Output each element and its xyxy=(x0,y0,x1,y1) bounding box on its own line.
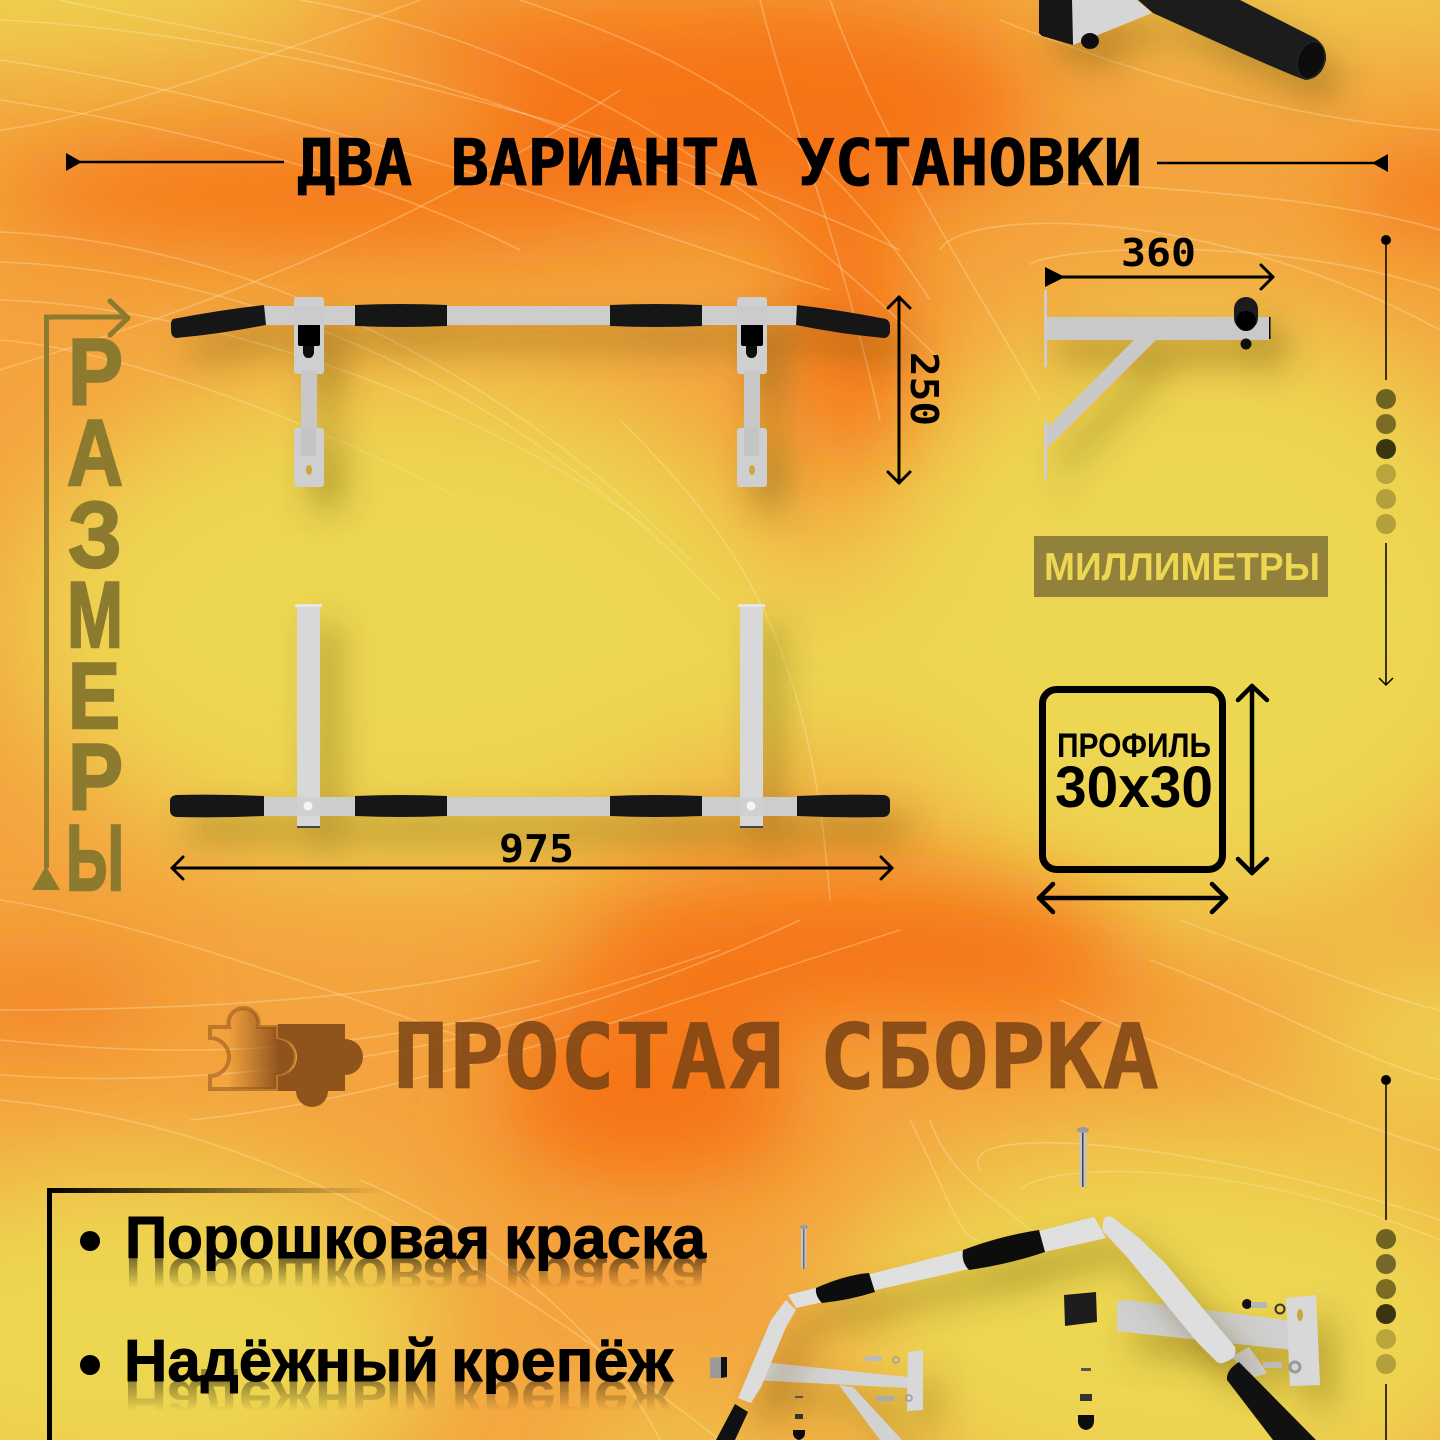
main bar xyxy=(262,306,799,325)
width dimension 250 xyxy=(888,297,946,483)
short anchor bolt xyxy=(800,1225,808,1269)
arrow frame xyxy=(32,301,128,890)
left grip xyxy=(171,305,266,338)
features panel xyxy=(47,1188,707,1440)
title rule left xyxy=(66,153,284,171)
feature: powder paint: Порошковая xyxy=(125,1205,490,1271)
left bracket xyxy=(294,297,324,487)
left black end grip xyxy=(716,1404,748,1440)
vertical word: З xyxy=(68,482,122,587)
right arm xyxy=(1102,1216,1236,1363)
left small plug xyxy=(710,1357,727,1378)
second view of bar, ceiling mounting xyxy=(170,604,890,828)
heading: simple assembly: СБОРКА xyxy=(819,1005,1159,1110)
feature: reliable fasteners: Надёжный xyxy=(124,1328,439,1394)
feature: reliable fasteners: крепёж xyxy=(451,1368,674,1434)
title: ДВА ВАРИАНТА УСТАНОВКИ xyxy=(297,127,1142,201)
grip right xyxy=(963,1230,1045,1270)
label 360: 360 xyxy=(1121,231,1196,275)
middle grips xyxy=(355,304,447,327)
side view of bracket xyxy=(1044,290,1270,479)
label 250: 250 xyxy=(902,352,946,426)
grip left xyxy=(816,1273,875,1303)
feature: powder paint: краска xyxy=(504,1205,707,1271)
right piece xyxy=(278,1024,363,1107)
feature: powder paint xyxy=(80,1205,707,1311)
nut xyxy=(1081,33,1099,49)
icon: puzzle pieces xyxy=(210,1008,363,1107)
title xyxy=(66,127,1388,201)
right bracket xyxy=(737,297,767,487)
heading: simple assembly xyxy=(393,1005,1159,1110)
panel frame xyxy=(47,1188,385,1440)
feature: powder paint: краска xyxy=(504,1245,707,1311)
heading: simple assembly: ПРОСТАЯ xyxy=(393,1005,782,1110)
units badge: МИЛЛИМЕТРЫ xyxy=(1044,546,1320,589)
depth dimension 360 xyxy=(1045,231,1273,289)
left bracket xyxy=(753,1350,923,1440)
left upright xyxy=(295,604,322,828)
main bent bar xyxy=(738,1216,1236,1403)
left piece xyxy=(210,1008,294,1089)
vertical word: Е xyxy=(68,643,120,748)
profile height arrow xyxy=(1238,686,1267,873)
right side rail with dots (bottom) xyxy=(1376,1075,1396,1440)
feature: reliable fasteners: крепёж xyxy=(451,1328,674,1394)
right grip xyxy=(796,305,890,338)
top fragment: bar end with grip xyxy=(1039,0,1330,82)
exploded assembly of the bar xyxy=(710,1127,1320,1440)
vertical word: М xyxy=(67,562,123,667)
vertical word: А xyxy=(67,400,123,505)
vertical word: Ы xyxy=(66,805,124,910)
vertical word: Р xyxy=(68,724,123,829)
small hardware xyxy=(793,1299,1300,1440)
bar tube xyxy=(788,1217,1106,1308)
side label: sizes xyxy=(32,301,128,910)
units badge xyxy=(1034,536,1328,597)
feature: powder paint: Порошковая xyxy=(125,1245,490,1311)
length dimension 975 xyxy=(172,827,892,879)
label 975: 975 xyxy=(499,827,574,871)
vertical word xyxy=(66,319,124,910)
end grip xyxy=(1234,297,1258,330)
right side rail with dots (top) xyxy=(1376,235,1396,685)
bar xyxy=(262,797,799,816)
profile section diagram: ПРОФИЛЬ xyxy=(1057,727,1211,765)
feature: reliable fasteners xyxy=(80,1328,674,1434)
left arm xyxy=(738,1300,796,1403)
feature: reliable fasteners: Надёжный xyxy=(124,1368,439,1434)
right bracket xyxy=(1117,1295,1320,1386)
long anchor bolt xyxy=(1077,1127,1089,1187)
profile width arrow xyxy=(1039,884,1226,912)
right upright xyxy=(738,604,765,828)
profile section diagram: 30x30 xyxy=(1055,755,1213,820)
black plug xyxy=(1064,1292,1097,1326)
title rule right xyxy=(1157,154,1388,172)
vertical word: Р xyxy=(68,319,123,424)
front view of bar with wall brackets xyxy=(171,297,890,487)
right black end grip xyxy=(1227,1362,1316,1440)
profile section diagram xyxy=(1039,686,1267,912)
